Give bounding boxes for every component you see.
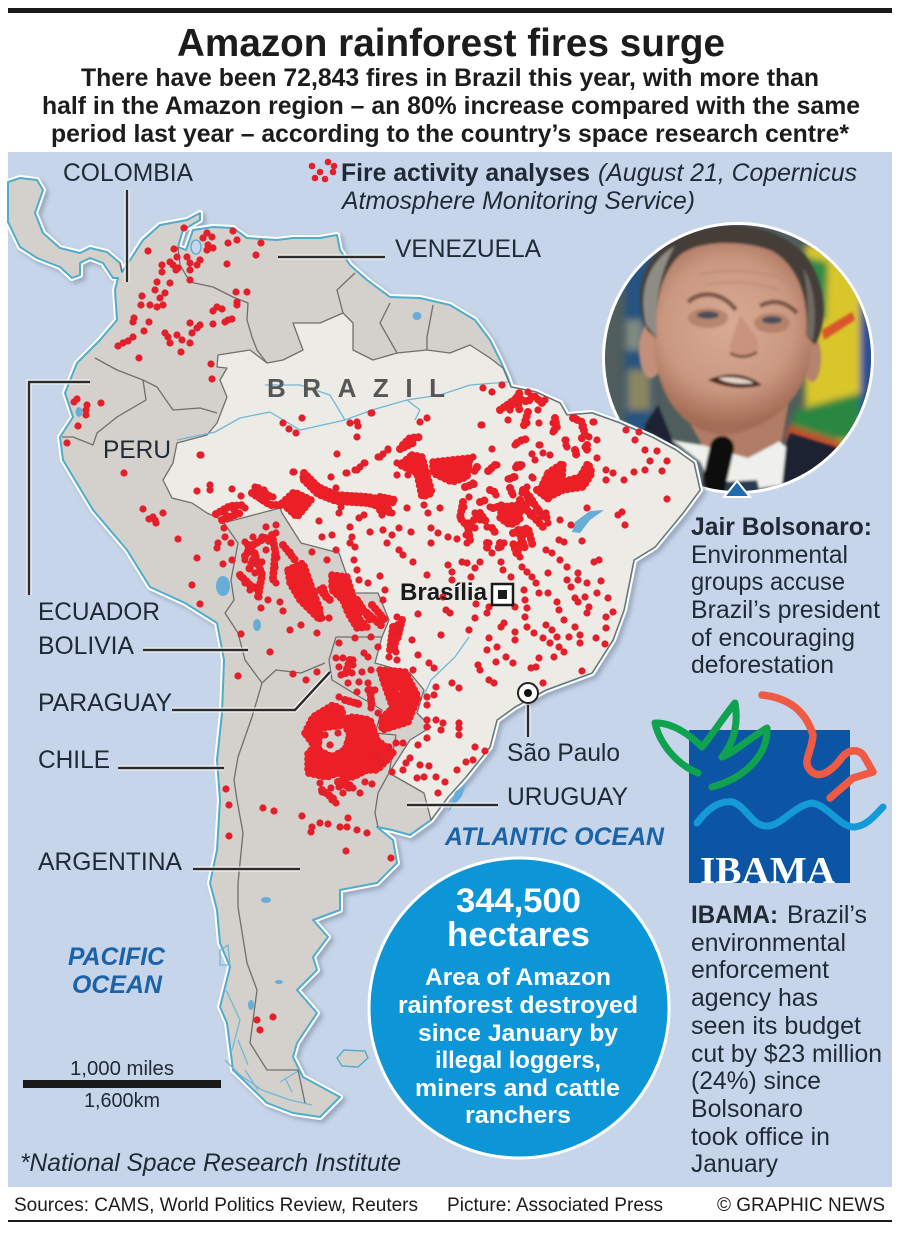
country labels: COLOMBIA (63, 160, 194, 187)
forehead lines (719, 282, 748, 284)
Falkland Islands (337, 1050, 368, 1067)
subtitle: There have been 72,843 fires in Brazil this year, with more than (81, 65, 819, 92)
ocean labels: PACIFIC (68, 944, 166, 971)
callout: 344,500 hectares: hectares (447, 916, 590, 954)
country labels: URUGUAY (507, 784, 628, 811)
text: IBAMA: seen its budget (691, 1013, 861, 1040)
text: Jair Bolsonaro: deforestation (691, 652, 834, 679)
country labels: PERU (103, 437, 171, 464)
text: IBAMA: IBAMA: (691, 902, 778, 929)
text: IBAMA: (24%) since (691, 1068, 821, 1095)
mouth (708, 375, 762, 388)
scale bar: 1,600km (84, 1090, 160, 1112)
face (652, 237, 812, 434)
footnote: *National Space Research Institute (20, 1150, 401, 1177)
text: IBAMA: cut by $23 million (691, 1041, 882, 1068)
Lake Maracaibo (191, 240, 201, 254)
legend: fire activity: (August 21, Copernicus (598, 160, 857, 187)
country labels: São Paulo (507, 740, 620, 767)
text: IBAMA: January (691, 1151, 779, 1178)
neck (690, 404, 790, 460)
legend: fire activity (312, 160, 857, 215)
rivers and lakes (177, 382, 508, 1105)
callout: 344,500 hectares: illegal loggers, (435, 1047, 601, 1074)
fire dots (67, 228, 667, 1030)
ocean labels: ATLANTIC OCEAN (444, 824, 665, 851)
tie (722, 478, 760, 491)
eye shadows (688, 308, 728, 328)
callout: 344,500 hectares: 344,500 (456, 882, 581, 920)
map: South America land (8, 178, 700, 1117)
footer sources: Sources: CAMS, World Politics Review, Reuters (14, 1195, 418, 1216)
nose (730, 315, 758, 358)
legend: fire activity: Atmosphere Monitoring Service) (340, 188, 695, 215)
text: Jair Bolsonaro: Jair Bolsonaro: (691, 514, 872, 541)
callout: 344,500 hectares: miners and cattle (415, 1075, 620, 1102)
text: IBAMA: Bolsonaro (691, 1096, 803, 1123)
logo: IBAMA: IBAMA (700, 850, 836, 892)
text: Jair Bolsonaro (691, 514, 880, 679)
ocean labels: OCEAN (72, 972, 163, 999)
Brasília capital marker and label: Brasília (400, 579, 488, 606)
text: IBAMA: environmental (691, 930, 846, 957)
scale bar: 1,000 miles (70, 1058, 174, 1080)
subtitle: half in the Amazon region – an 80% increase compared with the same (42, 93, 860, 120)
suit (643, 404, 677, 447)
photo: Jair Bolsonaro (600, 220, 880, 510)
dense fire clusters (282, 455, 592, 777)
scale bar (23, 1058, 221, 1112)
text: Jair Bolsonaro: Environmental (691, 542, 848, 569)
leader lines (29, 190, 528, 869)
country labels: PARAGUAY (38, 690, 172, 717)
legend: fire activity: Fire activity analyses (341, 160, 590, 187)
footer sources: © GRAPHIC NEWS (717, 1195, 885, 1216)
eyes (697, 311, 719, 319)
callout: 344,500 hectares (369, 858, 669, 1158)
callout: 344,500 hectares: ranchers (465, 1102, 571, 1129)
text: IBAMA: Brazil’s (787, 902, 867, 929)
photo pointer triangle (724, 481, 750, 497)
country labels: CHILE (38, 747, 110, 774)
country labels (38, 160, 628, 876)
bottom rule (8, 1220, 892, 1222)
logo: IBAMA (655, 695, 883, 892)
footer sources: Picture: Associated Press (447, 1195, 663, 1216)
title: Amazon rainforest fires surge (177, 22, 725, 65)
text: IBAMA: agency has (691, 985, 818, 1012)
national borders (62, 247, 433, 1103)
country labels: ARGENTINA (38, 849, 183, 876)
microphone (712, 448, 722, 492)
brows (688, 294, 736, 310)
callout: 344,500 hectares: rainforest destroyed (398, 992, 638, 1019)
Brazil (163, 313, 700, 820)
text: Jair Bolsonaro: Brazil’s president (691, 597, 880, 624)
text: IBAMA: took office in (691, 1124, 830, 1151)
text: IBAMA: enforcement (691, 957, 829, 984)
callout: 344,500 hectares: Area of Amazon (425, 964, 611, 991)
country labels: BOLIVIA (38, 633, 135, 660)
top rule (8, 8, 892, 13)
São Paulo marker (518, 683, 538, 703)
ocean labels (68, 824, 665, 999)
callout: 344,500 hectares: since January by (418, 1020, 618, 1047)
country labels: VENEZUELA (395, 236, 542, 263)
text: Jair Bolsonaro: of encouraging (691, 625, 855, 652)
text: IBAMA (691, 902, 882, 1178)
subtitle (42, 65, 860, 148)
footer sources (14, 1195, 885, 1216)
text: Jair Bolsonaro: groups accuse (691, 569, 845, 596)
shirt (670, 438, 788, 490)
hair (640, 225, 824, 345)
Brazil label: BRAZIL (267, 373, 445, 403)
country labels: ECUADOR (38, 599, 160, 626)
ears (639, 322, 663, 378)
subtitle: period last year – according to the country’s space research centre* (51, 121, 849, 148)
